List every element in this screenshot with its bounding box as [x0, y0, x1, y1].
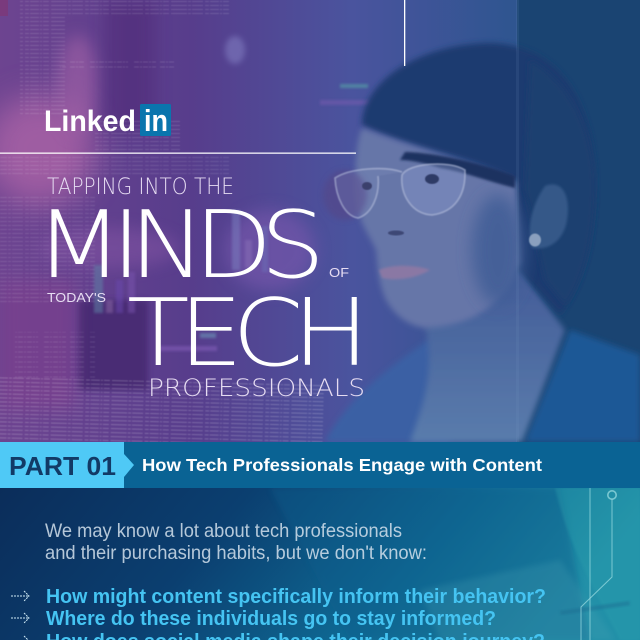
hair right blend — [525, 60, 594, 305]
part label tab — [0, 442, 134, 488]
arrow icons — [11, 591, 29, 640]
tapping into the: TAPPING INTO THE — [47, 175, 234, 200]
nose shadow — [388, 230, 404, 236]
banner heading: How Tech Professionals Engage with Content — [142, 455, 542, 475]
top vertical line — [404, 0, 405, 66]
glasses — [335, 164, 465, 218]
LinkedIn logo: in — [144, 103, 168, 138]
shirt right — [525, 330, 640, 442]
ear — [530, 184, 568, 248]
face shade — [472, 195, 524, 305]
question list: Where do these individuals go to stay informed? — [46, 608, 496, 630]
hair — [362, 43, 595, 315]
part 01 banner — [0, 442, 640, 488]
question list — [46, 586, 546, 640]
lower panel background — [0, 488, 640, 640]
circuit lines — [581, 488, 616, 640]
tech: TECH — [127, 279, 358, 388]
today's: TODAY'S — [47, 291, 106, 305]
part label: PART 01 — [9, 451, 116, 481]
intro text: We may know a lot about tech professionals — [45, 520, 402, 542]
question list: How might content specifically inform their behavior? — [46, 586, 546, 608]
hair band above glasses — [400, 152, 515, 188]
divider line — [0, 152, 356, 154]
neck and chest — [410, 270, 565, 442]
code text texture middle — [0, 157, 230, 380]
woman portrait — [323, 0, 640, 442]
code text texture top — [20, 0, 230, 152]
eyes — [425, 174, 439, 184]
LinkedIn logo: Linked — [44, 105, 136, 138]
lips — [379, 266, 430, 279]
earring — [529, 234, 541, 246]
code text texture bottom — [0, 374, 326, 448]
professionals: PROFESSIONALS — [148, 374, 365, 402]
title — [35, 175, 365, 402]
intro text: and their purchasing habits, but we don't know: — [45, 542, 427, 564]
minds: MINDS — [35, 191, 318, 300]
intro text — [45, 520, 427, 564]
chart bars in screen — [94, 84, 370, 351]
face — [355, 128, 520, 328]
screen reflection line — [516, 0, 519, 442]
shirt left — [325, 338, 450, 442]
of: OF — [329, 266, 349, 280]
hero photo background — [0, 0, 640, 448]
